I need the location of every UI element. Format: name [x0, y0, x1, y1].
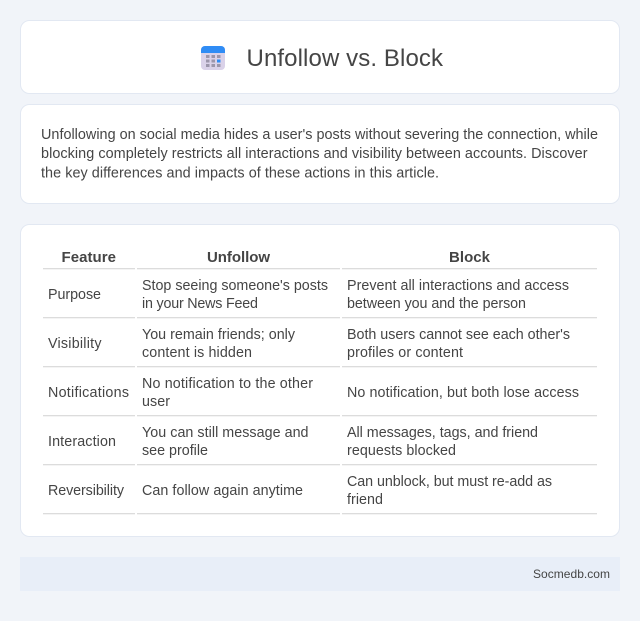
row: Notifications: [43, 376, 597, 416]
row: Visibility: Visibility: [48, 336, 102, 352]
panel: comparison table: [20, 224, 620, 536]
row: Interaction: see profile: [142, 443, 208, 459]
row: Purpose: Purpose: [48, 287, 101, 303]
row: Visibility: content is hidden: [142, 345, 252, 361]
title: Unfollow vs. Block: [246, 45, 444, 72]
row: Reversibility: Reversibility: [48, 483, 125, 499]
intro text: blocking completely restricts all interactions and visibility between accounts. Discover: [41, 146, 588, 162]
intro text: Unfollowing on social media hides a user's posts without severing the connection, while: [41, 127, 598, 143]
row: Visibility: profiles or content: [347, 345, 463, 361]
row: Reversibility: friend: [347, 492, 383, 508]
row: Visibility: Both users cannot see each other's: [347, 327, 570, 343]
row: Reversibility: Can follow again anytime: [142, 483, 303, 499]
footer source text: Socmedb.com: [533, 567, 610, 581]
panel: title card: [20, 20, 620, 94]
panel: intro card: [20, 104, 620, 204]
table header: Block: [449, 249, 491, 266]
icon: calendar: [201, 46, 225, 70]
row: Purpose: Prevent all interactions and access: [347, 278, 569, 294]
intro text: the key differences and impacts of these actions in this article.: [41, 166, 439, 182]
intro text: [41, 127, 598, 182]
table header: [43, 249, 597, 269]
row: Purpose: in your News Feed: [142, 296, 258, 312]
row: Reversibility: Can unblock, but must re-add as: [347, 474, 552, 490]
row: Notifications: No notification to the other: [142, 376, 313, 392]
table header: Unfollow: [207, 249, 270, 266]
row: Notifications: user: [142, 394, 170, 410]
table header: Feature: [62, 249, 116, 266]
row: Purpose: Stop seeing someone's posts: [142, 278, 328, 294]
row: Interaction: You can still message and: [142, 425, 309, 441]
row: Notifications: Notifications: [48, 385, 129, 401]
row: Interaction: Interaction: [48, 434, 116, 450]
row: Visibility: [43, 327, 597, 367]
row: Interaction: [43, 425, 597, 465]
footer bar: [20, 557, 620, 591]
row: Visibility: You remain friends; only: [142, 327, 296, 343]
row: Interaction: requests blocked: [347, 443, 456, 459]
row: Purpose: [43, 278, 597, 318]
row: Interaction: All messages, tags, and friend: [347, 425, 538, 441]
row: Purpose: between you and the person: [347, 296, 526, 312]
row: Reversibility: [43, 474, 597, 514]
row: Notifications: No notification, but both lose access: [347, 385, 579, 401]
